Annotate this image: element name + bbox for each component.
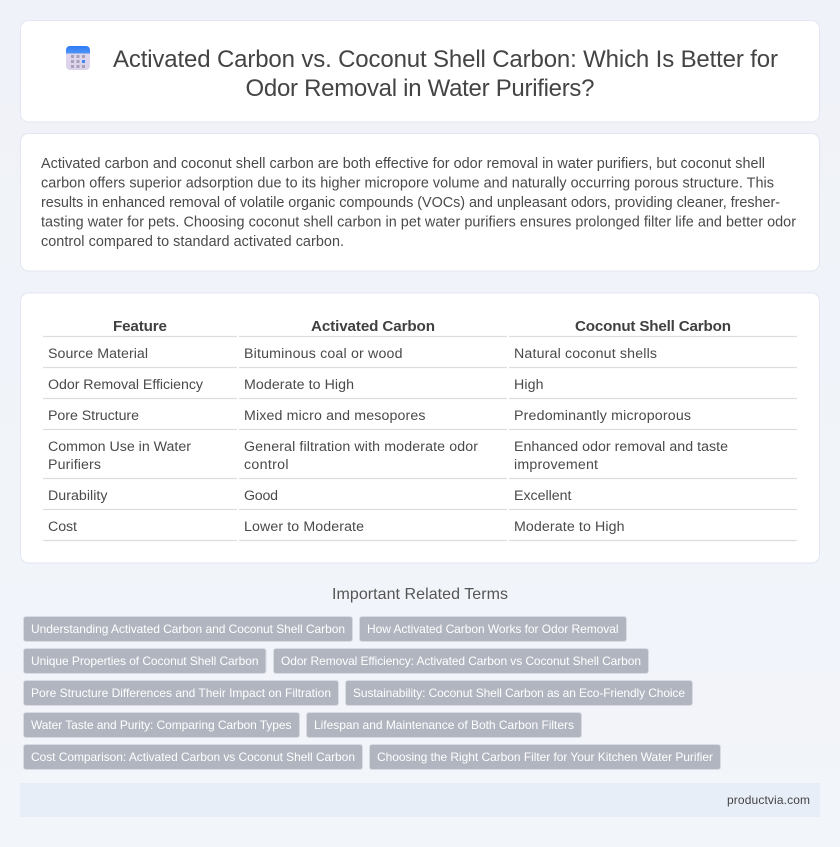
table header: Activated Carbon (311, 318, 435, 335)
row: common use: improvement (514, 457, 598, 473)
row: odor removal efficiency: Odor Removal Efficiency (48, 377, 204, 393)
footer (20, 783, 820, 817)
tag: Unique Properties of Coconut Shell Carbon (31, 654, 258, 668)
row: cost: Cost (48, 519, 77, 535)
tag (346, 680, 692, 706)
row: source material: Source Material (48, 346, 148, 362)
row: cost: Moderate to High (514, 519, 624, 535)
row: source material: Natural coconut shells (514, 346, 657, 362)
row: durability: Durability (48, 488, 108, 504)
row: common use: Enhanced odor removal and taste (514, 439, 728, 455)
row: source material: Bituminous coal or wood (244, 346, 402, 362)
row: pore structure: Predominantly microporous (514, 408, 691, 424)
row: cost (48, 519, 624, 535)
tag: Water Taste and Purity: Comparing Carbon Types (31, 718, 292, 732)
footer source text: productvia.com (727, 793, 810, 807)
tag: Sustainability: Coconut Shell Carbon as an Eco-Friendly Choice (353, 686, 685, 700)
panel: comparison table (20, 293, 820, 563)
text block: summary: Activated carbon and coconut shell carbon are both effective for odor removal in water purifiers, but coconut shell (41, 156, 765, 172)
row: odor removal efficiency: High (514, 377, 544, 393)
tag (24, 712, 300, 738)
row: pore structure: Mixed micro and mesopores (244, 408, 426, 424)
text block: summary: carbon offers superior adsorption due to its higher micropore volume and naturally occurring porous structure. This (41, 176, 774, 192)
tag: Choosing the Right Carbon Filter for Your Kitchen Water Purifier (377, 750, 713, 764)
row: common use: Purifiers (48, 457, 101, 473)
row: durability (48, 488, 572, 504)
tag (24, 744, 362, 770)
tag: Lifespan and Maintenance of Both Carbon Filters (314, 718, 574, 732)
title: Odor Removal in Water Purifiers? (246, 75, 594, 102)
title (113, 46, 778, 102)
tag (274, 648, 648, 674)
tag: Understanding Activated Carbon and Coconut Shell Carbon (31, 622, 345, 636)
text block: summary: results in enhanced removal of volatile organic compounds (VOCs) and unpleasant odors, providing cleaner, fresher- (41, 195, 780, 211)
tag (24, 680, 338, 706)
tag (24, 616, 352, 642)
tag: How Activated Carbon Works for Odor Removal (367, 622, 618, 636)
tag (24, 648, 266, 674)
row: common use: General filtration with moderate odor (244, 439, 478, 455)
tag (360, 616, 626, 642)
text block: summary (41, 156, 796, 250)
tag (370, 744, 720, 770)
text block: summary: tasting water for pets. Choosing coconut shell carbon in pet water purifiers ensures prolonged filter life and better odor (41, 214, 796, 230)
row: common use (48, 439, 728, 473)
table rules (43, 336, 797, 540)
tag list: related terms (24, 616, 720, 770)
row: pore structure: Pore Structure (48, 408, 139, 424)
heading: important related terms: Important Related Terms (332, 586, 508, 603)
text block: summary: control compared to standard activated carbon. (41, 234, 344, 250)
tag: Odor Removal Efficiency: Activated Carbon vs Coconut Shell Carbon (281, 654, 641, 668)
row: durability: Good (244, 488, 278, 504)
tag: Cost Comparison: Activated Carbon vs Coconut Shell Carbon (31, 750, 355, 764)
row: cost: Lower to Moderate (244, 519, 364, 535)
tag (306, 712, 582, 738)
tag: Pore Structure Differences and Their Impact on Filtration (31, 686, 331, 700)
row: odor removal efficiency (48, 377, 544, 393)
icon: calendar (66, 46, 90, 70)
table header: Coconut Shell Carbon (575, 318, 731, 335)
row: pore structure (48, 408, 691, 424)
title: Activated Carbon vs. Coconut Shell Carbon: Which Is Better for (113, 46, 778, 73)
row: durability: Excellent (514, 488, 572, 504)
row: odor removal efficiency: Moderate to High (244, 377, 354, 393)
row: common use: Common Use in Water (48, 439, 191, 455)
row: common use: control (244, 457, 288, 473)
panel: summary paragraph (20, 134, 820, 271)
row: source material (48, 346, 657, 362)
table header (113, 318, 731, 335)
panel: title card (20, 20, 820, 122)
table header: Feature (113, 318, 167, 335)
